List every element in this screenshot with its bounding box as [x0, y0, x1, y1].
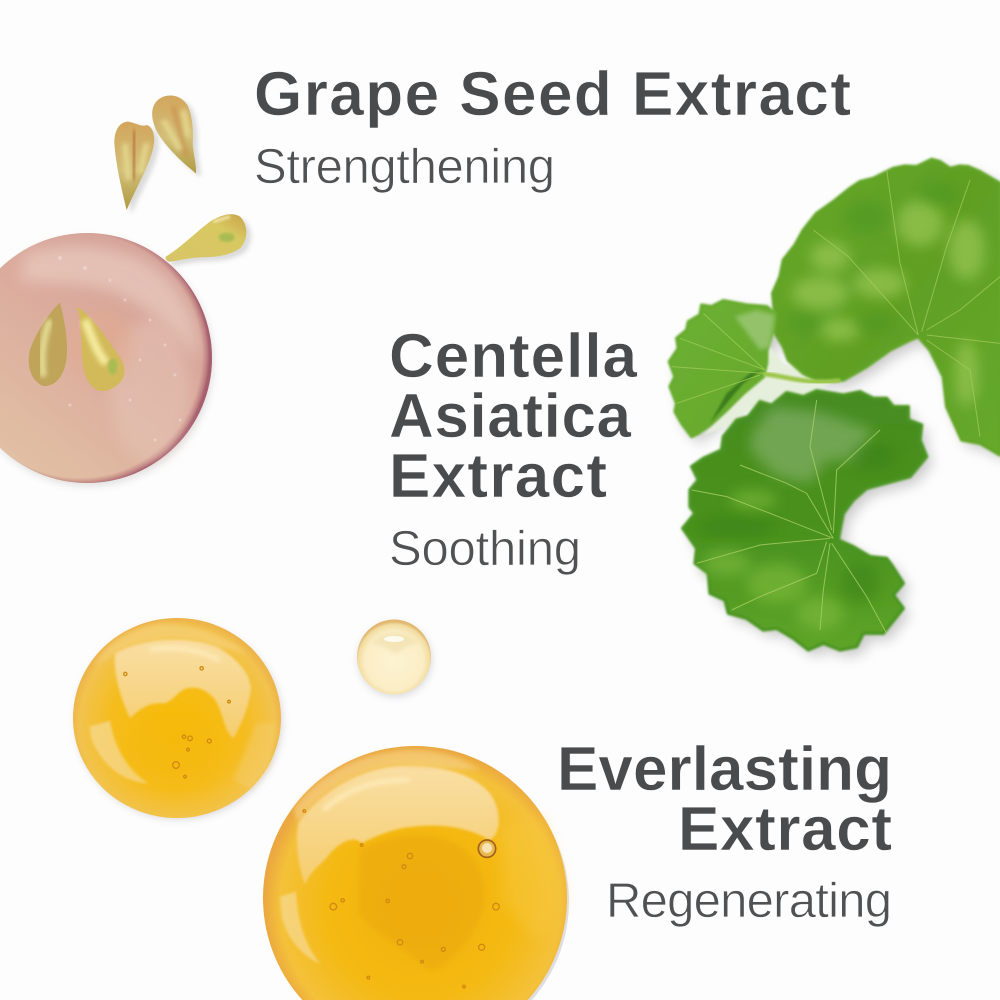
bubbles	[303, 810, 499, 988]
illustration: oil drop left	[73, 618, 282, 819]
title: everlasting extract	[557, 735, 892, 928]
title: everlasting extract: Everlasting	[557, 735, 892, 804]
illustration: small oil drop	[357, 620, 432, 697]
title: grape seed extract: Grape Seed Extract	[254, 60, 851, 129]
leaf: bottom	[683, 391, 927, 650]
grape highlights	[58, 256, 182, 442]
seed: top	[152, 96, 196, 173]
bubbles	[124, 667, 230, 778]
large bubble	[478, 840, 496, 857]
title: centella asiatica extract: Asiatica	[389, 382, 632, 451]
subtitle: strengthening: Strengthening	[254, 140, 555, 194]
seed: right	[166, 214, 246, 262]
seeds in grape slice	[29, 303, 125, 391]
title: grape seed extract	[254, 60, 851, 194]
stem	[765, 374, 838, 382]
title: centella asiatica extract: Centella	[389, 322, 638, 391]
subtitle: regenerating: Regenerating	[606, 874, 892, 928]
water film around stem	[703, 347, 837, 435]
title: centella asiatica extract	[389, 322, 638, 576]
illustration: oil drop large	[263, 746, 569, 1000]
title: centella asiatica extract: Extract	[389, 442, 607, 511]
title: everlasting extract: Extract	[678, 795, 892, 864]
illustration: grape slice	[0, 233, 213, 486]
leaf: top right	[773, 159, 1000, 455]
illustration: centella leaves	[669, 159, 1000, 657]
seed: left	[114, 122, 154, 210]
leaf: middle left	[669, 301, 775, 437]
subtitle: soothing: Soothing	[389, 522, 581, 576]
illustration: grape seeds	[114, 96, 251, 266]
